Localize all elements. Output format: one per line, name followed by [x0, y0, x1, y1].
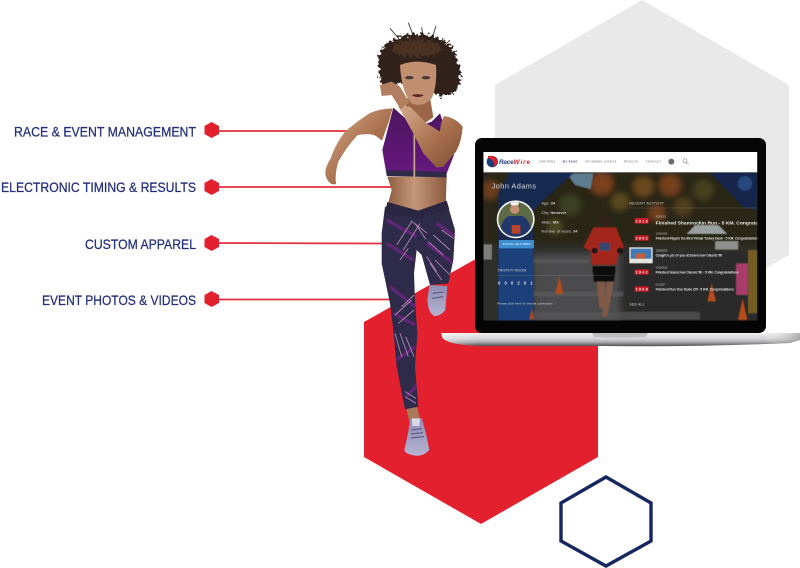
trophy room: 0 0 0 2 0 1 [498, 281, 533, 286]
bra band [386, 170, 447, 177]
activity row 5 [635, 284, 734, 292]
item: custom apparel: CUSTOM APPAREL [85, 236, 196, 252]
red hexagon [364, 256, 598, 524]
activity row 5: 8/1/2020 [656, 284, 665, 286]
zip [412, 133, 417, 178]
activity row 2: 11/26/2020 [656, 233, 668, 235]
athlete stats: Age: 34 [541, 201, 556, 206]
activity row 2 [635, 233, 759, 241]
gray background hexagon [495, 0, 789, 340]
nav bar: RESULTS [624, 160, 638, 164]
abdomen [387, 177, 447, 217]
hand [380, 82, 409, 109]
athlete stats: State: MA [541, 219, 559, 224]
traffic cones [529, 277, 747, 320]
activity row 2: 2 8 5 2 [636, 236, 648, 240]
activity row 1 [634, 216, 758, 226]
nav bar: MY PAGE [563, 160, 577, 164]
photo runner [583, 215, 624, 317]
hero photo [481, 172, 760, 322]
activity row 3 with photo [629, 247, 723, 263]
logo [487, 156, 530, 167]
face [400, 62, 436, 105]
activity row 5: 2 8 0 8 [636, 287, 648, 291]
item: electronic timing and results [1, 179, 392, 195]
laptop [441, 138, 800, 346]
front shoe [404, 418, 429, 456]
laptop screen [481, 152, 775, 322]
service list [1, 122, 392, 308]
item: event photos and videos: EVENT PHOTOS & VIDEOS [42, 292, 196, 308]
activity row 4: 10/18/2020 [656, 267, 668, 269]
profile name: John Adams [492, 181, 536, 190]
tent [687, 225, 727, 234]
logo: Wire [514, 159, 530, 166]
athlete stats: City: Hanover [541, 210, 567, 215]
activity row 1: 3/20/2021 [656, 216, 667, 218]
left arm [325, 108, 393, 184]
runner [325, 23, 463, 456]
leggings [382, 201, 455, 409]
social settings button: SOCIAL SETTINGS [503, 242, 531, 246]
waistband [385, 201, 449, 218]
nav bar [483, 152, 757, 172]
laptop base [441, 332, 800, 346]
item: race and event management: RACE & EVENT MANAGEMENT [14, 124, 196, 140]
front ankle [406, 407, 420, 421]
purple top [382, 108, 454, 173]
activity row 3 with photo: 10/18/2020 [656, 250, 668, 252]
recent activity: SEE ALL [629, 302, 645, 306]
activity row 2: Finished Flippin the Bird Virtual Turkey Dash - 5 KM. Congratulations [656, 237, 759, 241]
athlete stats [541, 201, 578, 234]
recent activity: RECENT ACTIVITY [629, 202, 665, 206]
activity row 4: Finished Scarecrow Classic 5K - 5 KM. Congratulations [656, 270, 739, 274]
rear shoe [427, 285, 447, 316]
nav bar: CONTACT [646, 160, 662, 164]
search icon [683, 159, 689, 164]
activity row 4 [635, 267, 739, 275]
finish arch [498, 172, 757, 321]
logo: Race [499, 159, 514, 166]
nav bar: UPCOMING EVENTS [585, 160, 616, 164]
trophy room [497, 269, 613, 305]
neck [405, 93, 433, 127]
banners [736, 263, 748, 295]
activity row 4: 2 8 4 2 [636, 270, 648, 274]
trophy room: TROPHY ROOM [497, 269, 526, 273]
activity row 1: 2 0 1 8 [636, 219, 648, 223]
trophy room: Please click here for results corrections [497, 301, 553, 305]
item: event photos and videos [42, 291, 392, 308]
activity row 3 with photo: Caught a pic of you at Scarecrow Classic 5K [656, 253, 723, 257]
eyes and mouth [405, 76, 430, 97]
laptop bezel [475, 138, 766, 333]
athlete stats: Number of races: 34 [541, 229, 578, 234]
item: custom apparel [85, 235, 385, 252]
activity row 1: Finished Shamrockin Run - 5 KM. Congratulations [656, 220, 775, 226]
runner upper body [325, 23, 463, 217]
navy outlined hexagon [561, 477, 651, 566]
hair [378, 23, 462, 96]
activity row 5: Finished Run Your Buns Off - 5 KM. Congratulations [656, 287, 734, 291]
sky [567, 173, 593, 189]
social settings button [499, 240, 534, 248]
avatar [497, 200, 535, 238]
right arm [398, 107, 463, 168]
item: race and event management [14, 122, 350, 140]
item: electronic timing and results: ELECTRONIC TIMING & RESULTS [1, 179, 196, 195]
runner lower body [382, 201, 455, 456]
recent activity [629, 202, 775, 306]
road markings [533, 292, 623, 296]
nav bar: FOR PROS [539, 160, 555, 164]
